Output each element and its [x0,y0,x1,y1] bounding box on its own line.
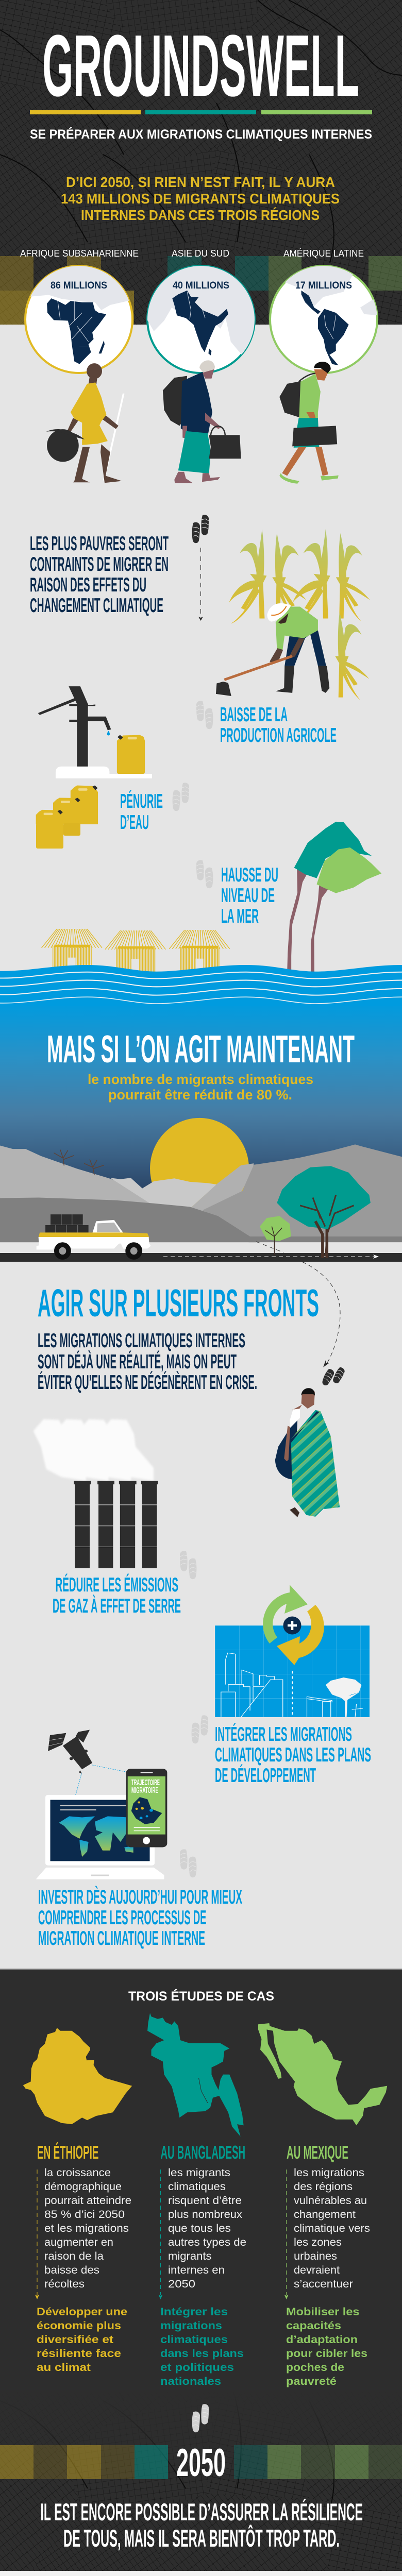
text: internal climate migration is a reality [38,1330,257,1394]
icon: grey footprints [196,860,213,888]
illustration: satellite [48,1730,126,1795]
headline statement: D’ICI 2050, SI RIEN N’EST FAIT, IL Y AURA [66,174,335,190]
label: lower farm output: BAISSE DE LA [220,704,288,726]
map circle: Asie du Sud: 40 MILLIONS [173,280,229,291]
phone screen text: MIGRATOIRE [131,1786,158,1795]
case study: Mexico: Mobiliser les [286,2306,360,2318]
walker: woman in green with backpack and duffel [279,362,339,484]
case study: Ethiopia: démographique [44,2181,122,2193]
case study: Mexico: urbaines [294,2250,337,2262]
text: poorest forced to migrate: CHANGEMENT CLIMATIQUE [30,595,163,617]
case study: Ethiopia: pourrait atteindre [44,2195,131,2207]
subheading: 80 percent: pourrait être réduit de 80 %. [108,1087,292,1103]
case study: Bangladesh: plus nombreux [168,2209,243,2221]
case study: Bangladesh: climatiques [168,2181,226,2193]
case study: Bangladesh: dans les plans [160,2348,244,2360]
case study: Bangladesh: migrations [160,2320,222,2332]
label: reduce emissions [53,1573,181,1617]
illustration: farmer with hoe [216,603,329,696]
text: poorest forced to migrate [30,533,169,617]
case study: Ethiopia: raison de la [44,2250,104,2262]
case study: Bangladesh: autres types de [168,2236,246,2248]
icon: light footprints [192,2404,209,2432]
icon: grey footprints [192,1715,208,1743]
ground strip and road [0,1236,402,1262]
text: LES PLUS PAUVRES SERONT [30,533,169,555]
case study: Bangladesh: risquent d’être [168,2195,242,2207]
case study: Bangladesh: que tous les [168,2223,231,2234]
label: sea level rise: LA MER [221,905,259,927]
sky gradient panel [0,1002,402,1190]
icon: grey footprints [180,1551,196,1579]
icon: grey footprints [180,1849,196,1877]
case study: Mexico: devraient [294,2264,340,2276]
walker: woman in yellow dress with bundle [46,363,124,483]
case study: Ethiopia: récoltes [44,2278,85,2290]
case study: Bangladesh: et politiques [160,2362,234,2374]
text: PÉNURIE [120,790,163,812]
label: sea level rise [221,864,278,927]
label: sea level rise: NIVEAU DE [221,885,275,907]
case study: Bangladesh: migrants [168,2250,211,2262]
illustration: smokestacks with smoke [34,1419,158,1568]
map circle: Amerique latine: 17 MILLIONS [295,280,352,291]
case study: Ethiopia: augmenter en [44,2236,113,2248]
case study: Ethiopia: Développer une [37,2306,127,2318]
case study: Mexico: des régions [294,2181,353,2193]
phone screen text [131,1778,160,1795]
illustration: laptop with world map [36,1795,164,1879]
case study: Ethiopia: la croissance [44,2167,111,2179]
case study: Mexico: climatique vers [294,2223,370,2234]
subheading: 80 percent [88,1072,313,1103]
headline statement [61,174,340,223]
case studies heading: TROIS ÉTUDES DE CAS [128,1989,274,2004]
case study: Mexico: AU MEXIQUE [287,2142,348,2163]
case study: Bangladesh: climatiques [160,2334,228,2346]
illustration: trees [260,1166,371,1258]
case study: Bangladesh [159,2142,246,2387]
icon: grey footprints [173,783,189,811]
case studies panel [0,1969,402,2571]
case study: Bangladesh: 2050 [168,2278,195,2290]
headline statement: INTERNES DANS CES TROIS RÉGIONS [81,207,320,223]
map circle: Afrique: 86 MILLIONS [51,280,107,291]
case study: Bangladesh: Intégrer les [160,2306,228,2318]
case study: Mexico [284,2142,370,2387]
dashed arrow [198,548,203,621]
case study: Bangladesh: internes en [168,2264,225,2276]
case study: Ethiopia: au climat [37,2362,91,2374]
map circle: Amerique latine [270,263,379,373]
case study: Mexico: capacités [286,2320,341,2332]
case study: Mexico: pour cibler les [286,2348,367,2360]
case study: Ethiopia: diversifiée et [37,2334,113,2346]
icon: grey footprints [196,701,213,729]
map: Mexico [258,2023,387,2125]
year 2050: 2050 [176,2441,226,2485]
icon: green and yellow cycle arrows with plus [263,1585,324,1665]
2050 colour band [0,2445,402,2479]
label: invest in understanding: MIGRATION CLIMATIQUE INTERNE [38,1927,205,1950]
illustration: city blueprint [215,1625,370,1717]
case study: Ethiopia: baisse des [44,2264,99,2276]
map: Bangladesh [147,2013,244,2137]
text: poorest forced to migrate: RAISON DES EFFETS DU [30,574,146,596]
case study: Ethiopia: 85 % d’ici 2050 [44,2209,125,2221]
footer panel [0,2571,402,2576]
case study: Ethiopia: économie plus [37,2320,121,2332]
case study: Mexico: s’accentuer [294,2278,353,2290]
label: invest in understanding [38,1886,242,1950]
map circle: Afrique [25,263,133,373]
illustration: sun over hills [0,1118,402,1242]
label: water shortage [120,790,163,834]
text: HAUSSE DU [221,864,278,886]
case study: Ethiopia: résiliente face [37,2348,121,2360]
waves [0,965,402,1006]
illustration: phone with migration map [126,1769,167,1847]
case study: Mexico: changement [294,2209,356,2221]
label: lower farm output [220,704,337,747]
illustration: wind-bent palm trees [287,822,381,972]
tricolour rule [30,110,372,114]
illustration: sugar cane crops [229,529,370,700]
dashed curved arrow [256,1242,340,1367]
map: Ethiopia [23,2028,132,2124]
closing statement [40,2498,363,2552]
illustration: woman in sari [275,1388,340,1517]
headline statement: 143 MILLIONS DE MIGRANTS CLIMATIQUES [61,191,340,207]
subheading: 80 percent: le nombre de migrants climatiques [88,1072,313,1087]
text: DE GAZ À EFFET DE SERRE [53,1595,181,1617]
illustration: yellow pickup truck [37,1214,151,1260]
case study: Mexico: d’adaptation [286,2334,358,2346]
header panel with street map texture [0,0,402,325]
illustration: water pump and jerrycan [38,686,152,778]
walker: elderly woman with backpack and bag [163,360,241,483]
illustration: stilt huts [42,929,230,974]
subtitle: SE PRÉPARER AUX MIGRATIONS CLIMATIQUES INTERNES [30,127,372,142]
region labels: ASIE DU SUD [172,248,229,259]
label: integrate into development plans [215,1723,371,1787]
text: RÉDUIRE LES ÉMISSIONS [56,1573,178,1596]
icon: dark footprints rotated [321,1362,346,1391]
case study: Mexico: vulnérables au [294,2195,367,2207]
case study: Mexico: poches de [286,2362,344,2374]
region labels: AMÉRIQUE LATINE [283,248,364,259]
text: CONTRAINTS DE MIGRER EN [30,553,169,575]
case study: Mexico: les zones [294,2236,342,2248]
case study: Bangladesh: les migrants [168,2167,230,2179]
case study: Bangladesh: nationales [160,2376,221,2387]
illustration: stack of jerrycans [36,785,98,849]
icon: dark footprints [192,515,209,543]
case study: Ethiopia [35,2142,131,2374]
case study: Ethiopia: et les migrations [44,2223,129,2234]
text: TRAJECTOIRE [131,1778,160,1787]
case study: Bangladesh: AU BANGLADESH [161,2142,245,2163]
case study: Mexico: pauvreté [286,2376,337,2387]
region labels: AFRIQUE SUBSAHARIENNE [20,248,139,259]
case study: Mexico: les migrations [294,2167,364,2179]
map circle: Asie du Sud [146,263,257,373]
label: invest in understanding: COMPRENDRE LES PROCESSUS DE [38,1907,206,1929]
label: water shortage: D’EAU [120,811,149,834]
region labels [20,248,364,259]
case study: Ethiopia: EN ÉTHIOPIE [37,2142,99,2163]
